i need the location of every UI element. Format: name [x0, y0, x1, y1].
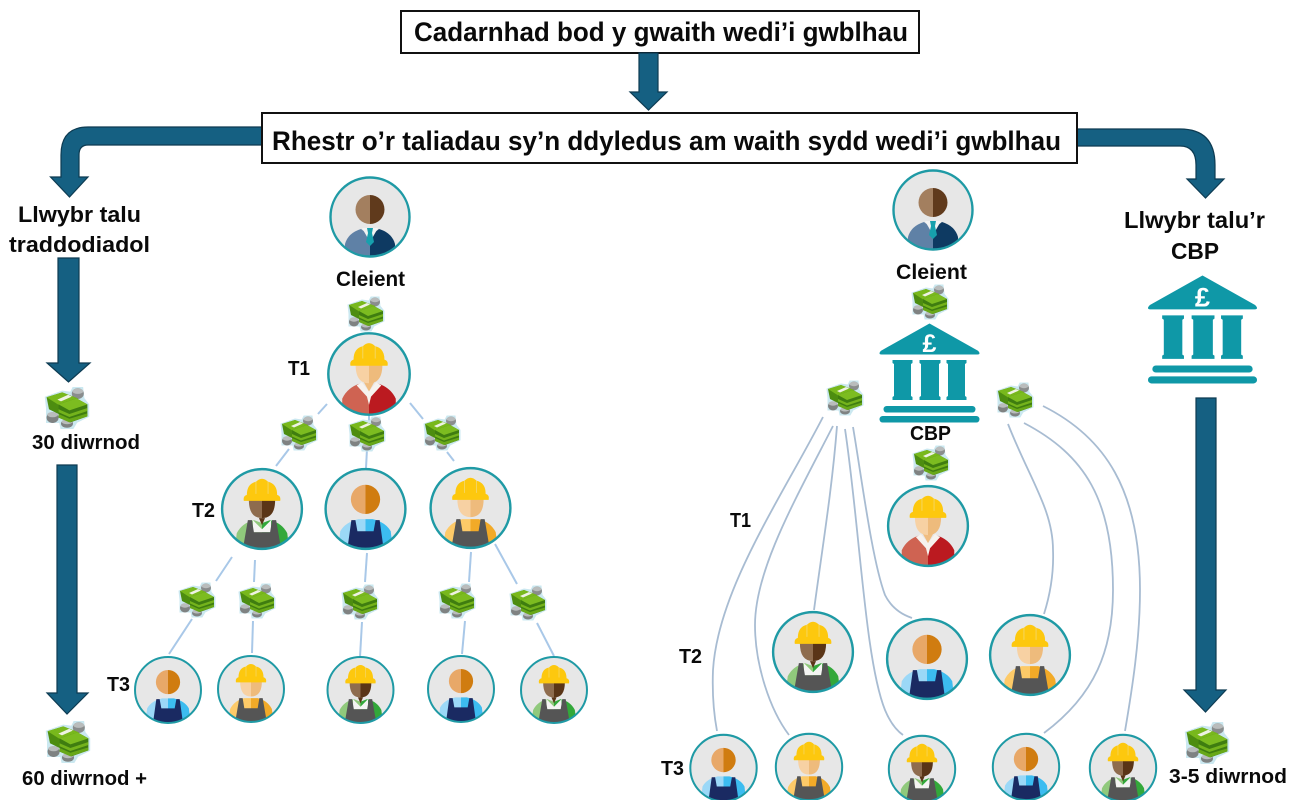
title box	[401, 11, 919, 53]
arrow: to CBP route	[1077, 129, 1224, 198]
icon: central bank	[880, 324, 980, 422]
avatar: T2 left (CBP route)	[773, 612, 853, 692]
label: client: Cleient	[336, 268, 405, 291]
avatar: T2 left	[222, 469, 302, 549]
icon: money client to T1	[348, 297, 384, 331]
label: 30 days: 30 diwrnod	[32, 432, 140, 454]
avatar: T3 5 (CBP route)	[1090, 735, 1156, 802]
heading: CBP route: Llwybr talu’r	[1124, 207, 1265, 233]
icon: central bank (CBP route): £	[1195, 282, 1210, 313]
icon: money bank right	[997, 383, 1033, 417]
avatar: T3 1	[135, 657, 201, 723]
label: T1: T1	[288, 358, 310, 380]
label: T2 (CBP route): T2	[679, 646, 702, 668]
avatar: T2 right	[431, 468, 510, 548]
list box	[262, 113, 1077, 163]
arrow: title to list	[630, 53, 667, 110]
arrow: CBP to 3-5 days	[1184, 398, 1226, 712]
avatar: T2 middle (CBP route)	[887, 619, 967, 699]
avatar: T2 right (CBP route)	[990, 615, 1070, 695]
icon: central bank (CBP route)	[1148, 276, 1257, 383]
icon: central bank: £	[923, 330, 937, 358]
label: 3-5 days: 3-5 diwrnod	[1169, 766, 1287, 788]
icon: money bank left	[827, 381, 863, 415]
icon: money bank to T1	[913, 446, 949, 480]
icon: money 30 days	[45, 388, 89, 428]
avatar: T1 (CBP route)	[888, 486, 968, 566]
heading: traditional route: traddodiadol	[9, 232, 150, 257]
icon: money T2 to T3 4	[439, 584, 475, 618]
arrow: to traditional route	[50, 127, 262, 197]
heading: traditional route: Llwybr talu	[18, 202, 141, 227]
avatar: T3 4	[428, 656, 494, 722]
avatar: T1 contractor	[328, 333, 410, 415]
label: T3 (CBP route): T3	[661, 758, 684, 780]
icon: money T2 to T3 5	[510, 586, 546, 620]
title box: Cadarnhad bod y gwaith wedi’i gwblhau	[414, 17, 908, 47]
avatar: T3 2	[218, 656, 284, 722]
icon: money 3-5 days	[1185, 723, 1229, 763]
icon: money T1 to T2 left	[281, 416, 317, 450]
heading: CBP route	[1124, 207, 1265, 264]
avatar: T3 3 (CBP route)	[889, 736, 955, 803]
avatar: T3 5	[521, 657, 587, 723]
icon: money T2 to T3 2	[239, 584, 275, 618]
avatar: T3 3	[328, 657, 393, 723]
icon: money 60 days	[46, 722, 90, 762]
arrow: traditional to 30 days	[47, 258, 90, 382]
label: T1 (CBP route): T1	[730, 510, 751, 532]
avatar: client	[330, 178, 410, 257]
label: client (CBP route): Cleient	[896, 261, 967, 284]
avatar: T3 1 (CBP route)	[690, 735, 757, 802]
avatar: T2 middle	[326, 469, 405, 549]
label: T2: T2	[192, 500, 215, 522]
icon: money T1 to T2 middle	[349, 417, 385, 451]
list box: Rhestr o’r taliadau sy’n ddyledus am waith sydd wedi’i gwblhau	[272, 126, 1061, 156]
avatar: client (CBP route)	[894, 170, 972, 250]
label: T3: T3	[107, 674, 130, 696]
avatar: T3 2 (CBP route)	[776, 734, 842, 801]
traditional tree connector lines	[169, 403, 554, 657]
label: CBP: CBP	[910, 423, 951, 445]
icon: money T2 to T3 3	[342, 585, 378, 619]
icon: money T2 to T3 1	[179, 583, 215, 617]
CBP tree connector lines	[713, 406, 1140, 735]
arrow: 30 to 60 days	[47, 465, 88, 714]
heading: CBP route: CBP	[1171, 238, 1219, 264]
icon: money client to bank	[912, 285, 948, 319]
icon: money T1 to T2 right	[424, 416, 460, 450]
avatar: T3 4 (CBP route)	[993, 734, 1059, 801]
heading: traditional route	[9, 202, 150, 257]
label: 60 days: 60 diwrnod +	[22, 768, 147, 790]
